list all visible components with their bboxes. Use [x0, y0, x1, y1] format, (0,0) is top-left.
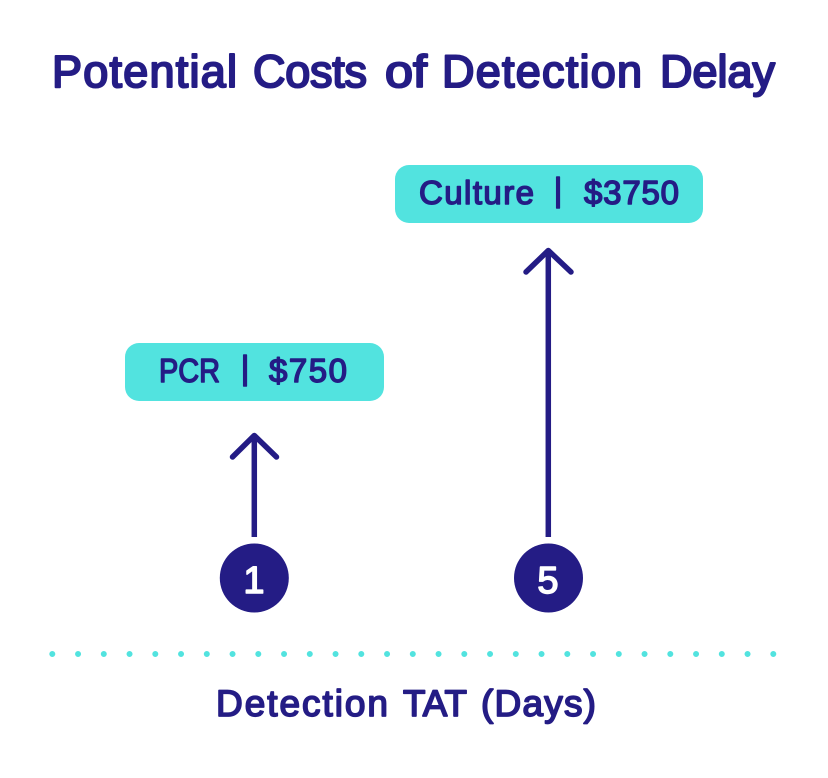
axis label: (Days)	[481, 683, 596, 724]
arrow: PCR	[232, 436, 276, 537]
title: Potential	[52, 46, 237, 97]
callout: culture cost: $3750	[584, 174, 679, 211]
title	[52, 46, 776, 97]
day marker 5	[514, 544, 583, 612]
callout: PCR cost	[125, 343, 384, 401]
axis label: TAT	[403, 683, 467, 724]
day marker 5: 5	[537, 560, 559, 602]
callout: culture cost: Culture	[419, 174, 534, 211]
callout: PCR cost: $750	[269, 352, 347, 389]
callout: culture cost: |	[554, 171, 562, 208]
axis label	[216, 683, 596, 724]
dotted axis	[52, 651, 775, 657]
arrow: culture	[526, 250, 571, 537]
callout: culture cost	[395, 165, 703, 223]
day marker 1: 1	[243, 560, 265, 602]
title: Costs	[253, 46, 367, 97]
axis label: Detection	[216, 683, 388, 724]
callout: PCR cost: PCR	[159, 352, 220, 389]
day marker 1	[220, 544, 289, 612]
title: Delay	[660, 46, 776, 97]
title: Detection	[442, 46, 642, 97]
title: of	[385, 46, 428, 97]
callout: PCR cost: |	[241, 349, 249, 386]
